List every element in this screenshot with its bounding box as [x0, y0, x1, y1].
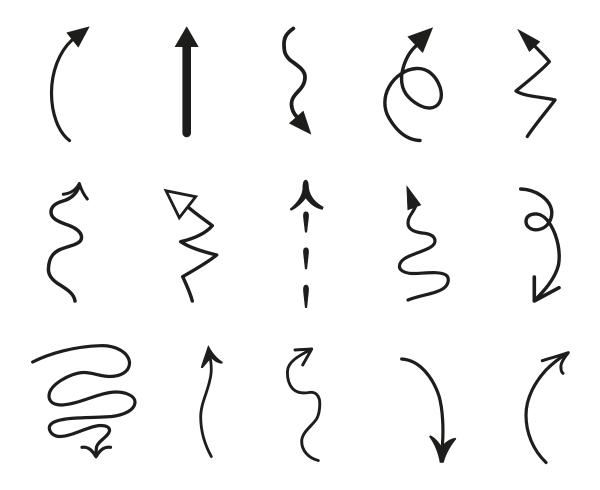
- arrow: loop curling down: [521, 189, 559, 301]
- dash: [303, 248, 309, 269]
- arrow: curved down: [402, 359, 456, 462]
- arrow: wavy up-right with open head: [287, 349, 320, 460]
- arrow: slender wavy up: [201, 346, 222, 456]
- arrow: curved up-right with open head: [526, 353, 568, 462]
- dash: [303, 285, 309, 308]
- arrow: wide serpentine down: [33, 346, 135, 457]
- arrow: wavy up with open head: [48, 184, 87, 301]
- arrow: zigzag with hollow triangle head: [166, 191, 217, 301]
- arrow: winding up with solid head: [399, 186, 448, 300]
- arrow: zigzag up-left: [516, 29, 555, 136]
- arrow: thick straight up: [175, 27, 198, 133]
- arrow: loop up-right: [385, 28, 441, 141]
- arrow: dashed up: [290, 180, 323, 308]
- dash: [303, 212, 309, 232]
- arrow: curved up-right with solid head: [52, 27, 89, 141]
- arrow: wavy down-right: [284, 28, 311, 134]
